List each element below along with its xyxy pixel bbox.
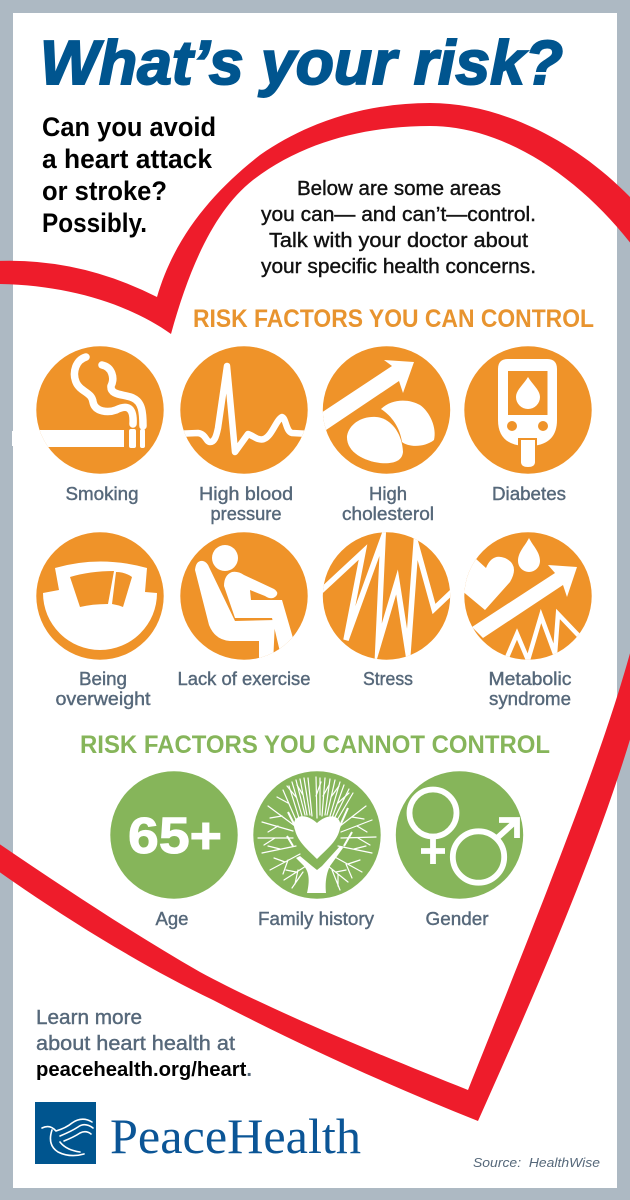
label: lack of exercise: Lack of exercise [178,669,310,689]
lead question [42,112,216,238]
label: being overweight [56,669,150,709]
title: What’s your risk? [40,29,563,98]
label: family history: Family history [258,909,374,929]
icon: family history tree [253,771,381,899]
label: being overweight: overweight [56,689,150,709]
heading: risk factors you cannot control: RISK FACTORS YOU CANNOT CONTROL [80,731,550,759]
heading: risk factors you can control: RISK FACTORS YOU CAN CONTROL [193,305,594,333]
icon: age 65+: 65+ [128,807,222,864]
intro text: your specific health concerns. [261,256,536,278]
label: high blood pressure [199,484,293,524]
label: diabetes: Diabetes [492,484,566,504]
icon: diabetes [464,346,592,474]
learn more text [36,1007,252,1081]
icon: stress [320,532,454,660]
icon: high blood pressure [175,346,310,474]
label: high cholesterol: High [369,484,407,504]
icon: age 65+ [110,771,238,899]
label: metabolic syndrome: syndrome [489,689,571,709]
lead question: a heart attack [42,144,213,174]
lead question: or stroke? [42,176,167,206]
label: stress: Stress [363,669,413,689]
learn more text: peacehealth.org/heart. [36,1059,252,1081]
label: high blood pressure: pressure [210,504,282,524]
label: being overweight: Being [79,669,127,689]
logo: PeaceHealth dove [35,1102,96,1164]
icon: metabolic syndrome [455,532,592,662]
icon: gender symbols [396,771,523,899]
label: high blood pressure: High blood [199,484,293,504]
source note: Source: HealthWise [473,1156,600,1170]
lead question: Possibly. [42,208,147,238]
label: metabolic syndrome: Metabolic [488,669,572,689]
intro text: Talk with your doctor about [269,230,528,252]
intro text [261,178,536,278]
lead question: Can you avoid [42,112,216,142]
label: high cholesterol [342,484,434,524]
icon: lack of exercise [180,532,308,665]
icon: being overweight [36,532,164,660]
label: metabolic syndrome [488,669,572,709]
label: gender: Gender [426,909,488,929]
logo wordmark: PeaceHealth [110,1108,361,1164]
icon: smoking [30,346,164,474]
intro text: you can— and can’t—control. [261,204,536,226]
label: age: Age [156,909,188,929]
label: smoking: Smoking [66,484,138,504]
icon: high cholesterol [315,346,450,474]
label: high cholesterol: cholesterol [342,504,434,524]
learn more text: Learn more [36,1007,142,1029]
intro text: Below are some areas [297,178,501,200]
learn more text: about heart health at [36,1033,235,1055]
